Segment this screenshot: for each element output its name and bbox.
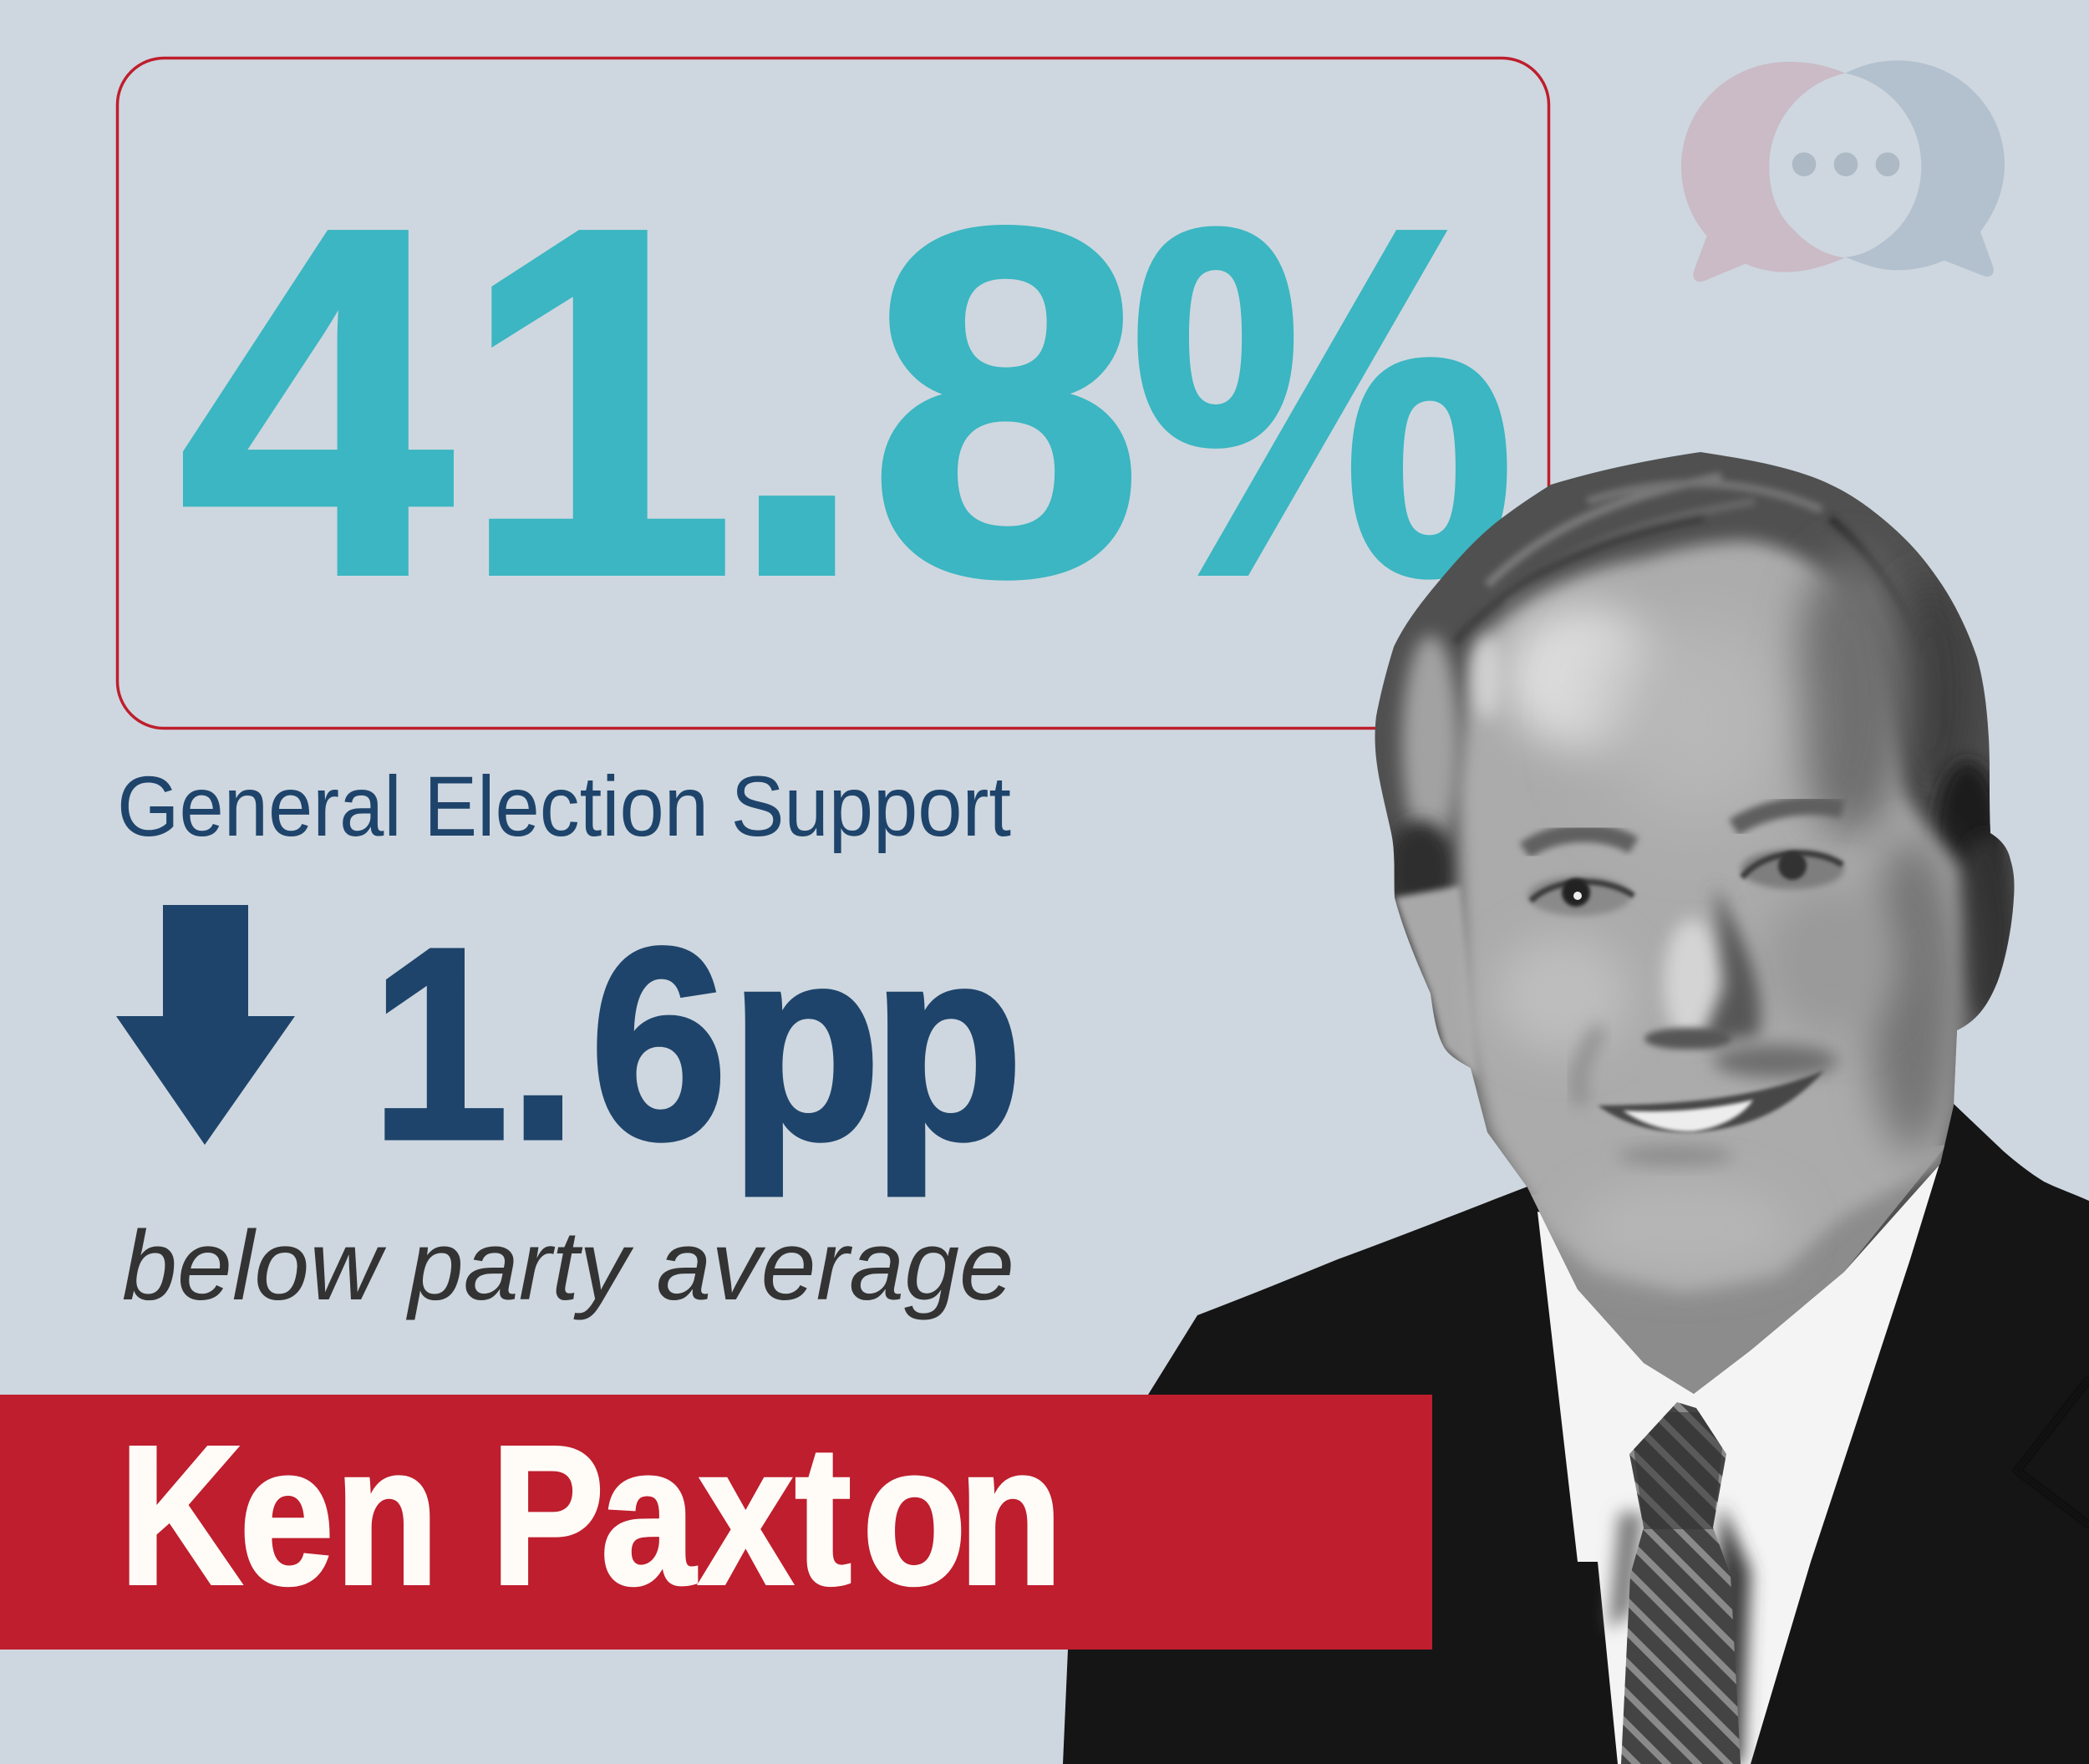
face shading	[1792, 552, 1909, 836]
name: Ken Paxton: Ken Paxton	[119, 1405, 1063, 1625]
label: general election support: General Election Support	[117, 759, 1011, 854]
smile	[1598, 1070, 1824, 1132]
icon: down arrow	[116, 905, 295, 1145]
head and hair	[1354, 435, 2039, 1404]
brows	[1525, 833, 1634, 851]
hair streaks	[1453, 470, 1903, 644]
icon: chat bubbles	[1681, 60, 2005, 282]
face base	[1457, 541, 1959, 1291]
caption: below party average: below party average	[122, 1211, 1014, 1321]
shirt	[1538, 1162, 1940, 1764]
outlined stat box	[117, 58, 1549, 729]
name banner	[0, 1395, 1432, 1650]
neck	[1529, 1145, 1947, 1394]
photo: portrait of candidate	[1063, 435, 2089, 1764]
shirt shadow beside tie	[1609, 1504, 1751, 1764]
tie	[1621, 1402, 1741, 1764]
stat: 1.6pp: 1.6pp	[371, 892, 1024, 1198]
big stat: 41.8%: %	[1130, 126, 1516, 677]
jacket lapel detail	[2017, 1379, 2089, 1525]
eyes	[1527, 876, 1631, 916]
jacket	[1063, 1104, 2089, 1764]
big stat: 41.8%: 41.8	[179, 127, 1143, 678]
